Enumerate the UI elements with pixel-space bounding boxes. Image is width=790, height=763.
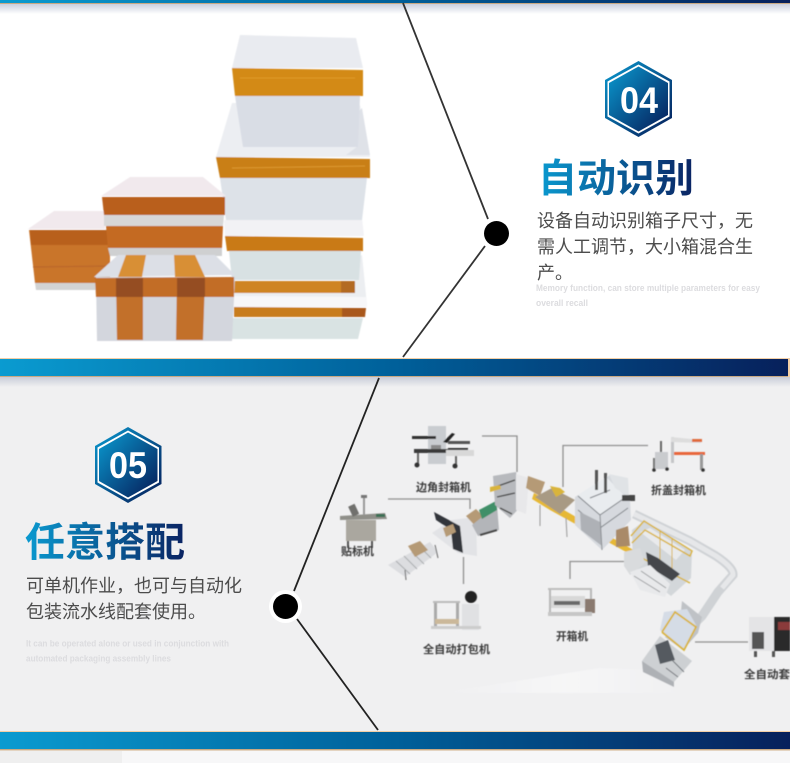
product boxes xyxy=(616,526,630,547)
english note 04: Memory function, can store multiple parameters for easy xyxy=(536,283,760,293)
panel: flexible pairing xyxy=(0,377,790,731)
badge 05 xyxy=(95,427,162,503)
connector lines and node 05 xyxy=(269,378,379,730)
label: flap sealer: 折盖封箱机 xyxy=(651,483,706,497)
bottom bar xyxy=(0,731,790,750)
case packer tower xyxy=(575,475,631,550)
description 05: 包装流水线配套使用。 xyxy=(26,602,206,622)
box: small left xyxy=(28,211,110,290)
photo: stacked foam boxes with tape xyxy=(28,35,370,341)
label: corner sealer: 边角封箱机 xyxy=(416,480,471,494)
machine: shrink wrapper xyxy=(749,617,790,657)
divider bar xyxy=(0,358,790,377)
english note 04: overall recall xyxy=(536,298,588,308)
label: shrink wrapper: 全自动套 xyxy=(744,667,790,681)
bottom strip xyxy=(0,751,790,763)
english note 05: It can be operated alone or used in conjunction with xyxy=(26,638,229,648)
label: box opener: 开箱机 xyxy=(556,629,588,643)
description 04: 设备自动识别箱子尺寸，无 xyxy=(537,211,753,231)
production line centre xyxy=(388,470,733,687)
box: large stack, bottom xyxy=(232,255,367,339)
top bar xyxy=(0,0,790,4)
end packer xyxy=(665,601,702,650)
palletiser frame xyxy=(632,522,692,596)
roller conveyor xyxy=(388,542,438,577)
machine: corner sealer xyxy=(412,426,474,468)
corner sealer section xyxy=(493,472,523,518)
yellow main conveyor xyxy=(532,493,639,558)
machine: strapping xyxy=(431,591,481,630)
description 04: 产。 xyxy=(537,263,573,283)
description 05: 可单机作业，也可与自动化 xyxy=(26,576,242,596)
label: labeler: 贴标机 xyxy=(341,544,374,558)
box: small middle xyxy=(101,177,226,256)
curved roller conveyor xyxy=(634,514,733,632)
soft floor shadow xyxy=(440,668,690,693)
box: large stack, third xyxy=(224,218,364,293)
connector lines and node 04 xyxy=(403,3,509,357)
panel: automatic recognition xyxy=(0,0,790,358)
heading 05: 任意搭配 xyxy=(25,521,185,565)
machine: flap sealer xyxy=(652,437,705,472)
description 04: 需人工调节，大小箱混合生 xyxy=(537,237,753,257)
label: strapping: 全自动打包机 xyxy=(423,642,490,656)
badge 04 xyxy=(605,61,672,137)
strapping frame xyxy=(432,517,477,556)
machine: box opener xyxy=(548,588,595,616)
box: front strapped xyxy=(94,255,235,341)
labeler section xyxy=(472,505,499,536)
machine: labeler xyxy=(340,495,387,548)
box: large stack, second xyxy=(216,103,370,220)
connector leaders xyxy=(388,436,748,642)
box: large stack, top xyxy=(232,35,363,147)
packaging line diagram xyxy=(340,426,790,693)
heading 04: 自动识别 xyxy=(538,158,694,201)
badge 05: 05 xyxy=(109,445,147,486)
badge 04: 04 xyxy=(620,80,658,121)
english note 05: automated packaging assembly lines xyxy=(26,654,171,664)
